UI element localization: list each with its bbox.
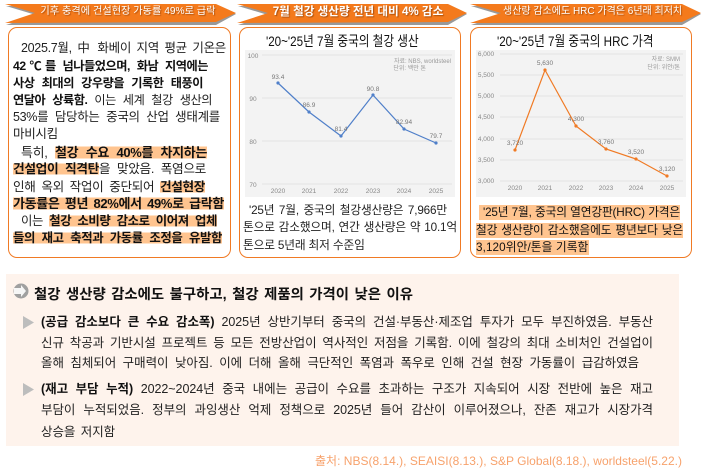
panel: steel production chart: 톤으로 5년래 최저 수준임 <box>243 239 365 252</box>
panel: left text on weather shock: 연달아 상륙함. 이는 세계 철강 생산의 <box>13 93 212 107</box>
panel: left text on weather shock: 건설업이 직격탄을 맞았음. 폭염으로 <box>13 162 206 176</box>
panel: left text on weather shock <box>8 27 231 258</box>
text block: inventory burden: 부담이 누적되었음. 정부의 과잉생산 억제 정책으로 2025년 들어 감산이 이루어졌으나, 잔존 재고가 시장가격 <box>41 403 653 417</box>
line chart: steel production <box>245 50 455 197</box>
banner: HRC price low <box>470 4 701 25</box>
source note: 출처: NBS(8.14.), SEAISI(8.13.), S&P Global(8.18.), worldsteel(5.22.) <box>315 454 682 468</box>
panel: left text on weather shock: 가동률은 평년 82%에서 49%로 급락함 <box>13 196 224 211</box>
panel: why prices are low <box>6 274 679 446</box>
panel: steel production chart: '25년 7월, 중국의 철강생산량은 7,966만 <box>249 204 447 217</box>
text block: demand decline: 신규 착공과 기반시설 프로젝트 등 모든 전방산업이 역사적인 저점을 기록함. 이에 철강의 최대 소비처인 건설업이 <box>41 336 653 350</box>
banner: construction utilisation <box>5 4 236 25</box>
panel: left text on weather shock: 들의 재고 축적과 가동률 조정을 유발함 <box>13 231 222 245</box>
text block: demand decline: 올해 침체되어 구매력이 낮아짐. 이에 더해 올해 극단적인 폭염과 폭우로 인해 건설 현장 가동률이 급감하였음 <box>41 356 639 370</box>
icon: triangle bullet two <box>23 383 34 396</box>
line chart: steel production: 80 <box>249 139 257 146</box>
line chart: steel production: 100 <box>248 53 259 60</box>
line chart: HRC price: 2025 <box>660 185 675 192</box>
line chart: steel production: 93.4 <box>272 74 285 81</box>
line chart: steel production: 2021 <box>302 188 317 195</box>
icon: section bullet <box>14 284 28 298</box>
line chart: HRC price: 4,500 <box>478 114 495 121</box>
line chart: HRC price: 5,630 <box>537 60 554 67</box>
text block: demand decline: (공급 감소보다 큰 수요 감소폭) 2025년 상반기부터 중국의 건설·부동산·제조업 투자가 모두 부진하였음. 부동산 <box>41 315 653 329</box>
line chart: HRC price: 2021 <box>538 185 553 192</box>
panel: left text on weather shock: 사상 최대의 강우량을 기록한 태풍이 <box>13 76 203 90</box>
banner: steel output down <box>237 4 467 25</box>
line chart: steel production: 2022 <box>334 188 349 195</box>
line chart: HRC price: 4,300 <box>568 116 585 123</box>
panel: HRC price chart <box>470 27 692 258</box>
line chart: steel production: 자료: NBS, worldsteel <box>394 57 451 65</box>
text block: inventory burden: (재고 부담 누적) 2022~2024년 중국 내에는 공급이 수요를 초과하는 구조가 지속되어 시장 전반에 높은 재고 <box>41 382 653 396</box>
panel: left text on weather shock: 인해 옥외 작업이 중단되어 건설현장 <box>13 180 205 194</box>
line chart: steel production: 2023 <box>366 188 381 195</box>
chart title: '20~'25년 7월 중국의 HRC 가격 <box>497 33 653 49</box>
line chart: HRC price: 3,000 <box>478 178 495 185</box>
panel: steel production chart <box>239 27 461 258</box>
line chart: steel production: 2020 <box>271 188 286 195</box>
panel: left text on weather shock: 53%를 담당하는 중국의 산업 생태계를 <box>13 110 220 124</box>
line chart: steel production: 79.7 <box>430 133 443 140</box>
line chart: HRC price: 3,520 <box>628 149 645 156</box>
text block: inventory burden: 상승을 저지함 <box>41 425 115 439</box>
line chart: HRC price: 3,120 <box>659 166 676 173</box>
line chart: HRC price: 자료: SMM <box>652 55 680 63</box>
line chart: HRC price: 3,500 <box>478 157 495 164</box>
panel: steel production chart: 톤으로 감소했으며, 연간 생산량은 약 10.1억 <box>243 221 457 234</box>
line chart: HRC price: 3,720 <box>507 140 524 147</box>
chart title: '20~'25년 7월 중국의 철강 생산 <box>266 33 419 49</box>
line chart: HRC price: 5,500 <box>478 72 495 79</box>
line chart: steel production: 70 <box>249 182 257 189</box>
line chart: HRC price: 2020 <box>508 185 523 192</box>
panel: left text on weather shock: 특히, 철강 수요 40%를 차지하는 <box>21 145 207 160</box>
line chart: steel production: 단위: 백만 톤 <box>393 64 426 72</box>
line chart: HRC price: 3,760 <box>598 139 615 146</box>
section heading: 철강 생산량 감소에도 불구하고, 철강 제품의 가격이 낮은 이유 <box>34 287 413 303</box>
line chart: steel production: 82.94 <box>396 119 413 126</box>
text block: inventory burden <box>41 382 653 439</box>
panel: left text on weather shock: 마비시킴 <box>13 127 58 141</box>
banner: construction utilisation: 기후 충격에 건설현장 가동률 49%로 급락 <box>40 6 216 17</box>
panel: left text on weather shock: 이는 철강 소비량 감소로 이어져 업체 <box>21 214 217 228</box>
line chart: HRC price <box>476 50 686 197</box>
line chart: steel production: 90.8 <box>367 86 380 93</box>
line chart: HRC price: 단위: 위안/톤 <box>647 63 680 71</box>
panel: HRC price chart: 철강 생산량이 감소했음에도 평년보다 낮은 <box>476 224 683 237</box>
line chart: steel production: 2025 <box>429 188 444 195</box>
panel: HRC price chart: 3,120위안/톤을 기록함 <box>476 241 588 254</box>
banner: steel output down: 7월 철강 생산량 전년 대비 4% 감소 <box>273 5 443 18</box>
line chart: HRC price: 2022 <box>569 185 584 192</box>
icon: triangle bullet one <box>23 316 34 329</box>
line chart: steel production: 81.4 <box>335 126 348 133</box>
panel: left text on weather shock: 42℃를 넘나들었으며, 화남 지역에는 <box>13 59 208 73</box>
line chart: steel production: 86.9 <box>303 102 316 109</box>
panel: HRC price chart: '25년 7월, 중국의 열연강판(HRC) 가격은 <box>483 206 680 219</box>
banner: HRC price low: 생산량 감소에도 HRC 가격은 6년래 최저치 <box>503 6 682 17</box>
line chart: steel production: 90 <box>249 96 257 103</box>
line chart: HRC price: 4,000 <box>478 136 495 143</box>
line chart: HRC price: 5,000 <box>478 93 495 100</box>
line chart: HRC price: 6,000 <box>478 51 495 58</box>
line chart: steel production: 2024 <box>397 188 412 195</box>
text block: demand decline <box>41 315 653 370</box>
line chart: HRC price: 2023 <box>599 185 614 192</box>
panel: left text on weather shock: 2025.7월, 中 화베이 지역 평균 기온은 <box>21 41 226 55</box>
line chart: HRC price: 2024 <box>629 185 644 192</box>
